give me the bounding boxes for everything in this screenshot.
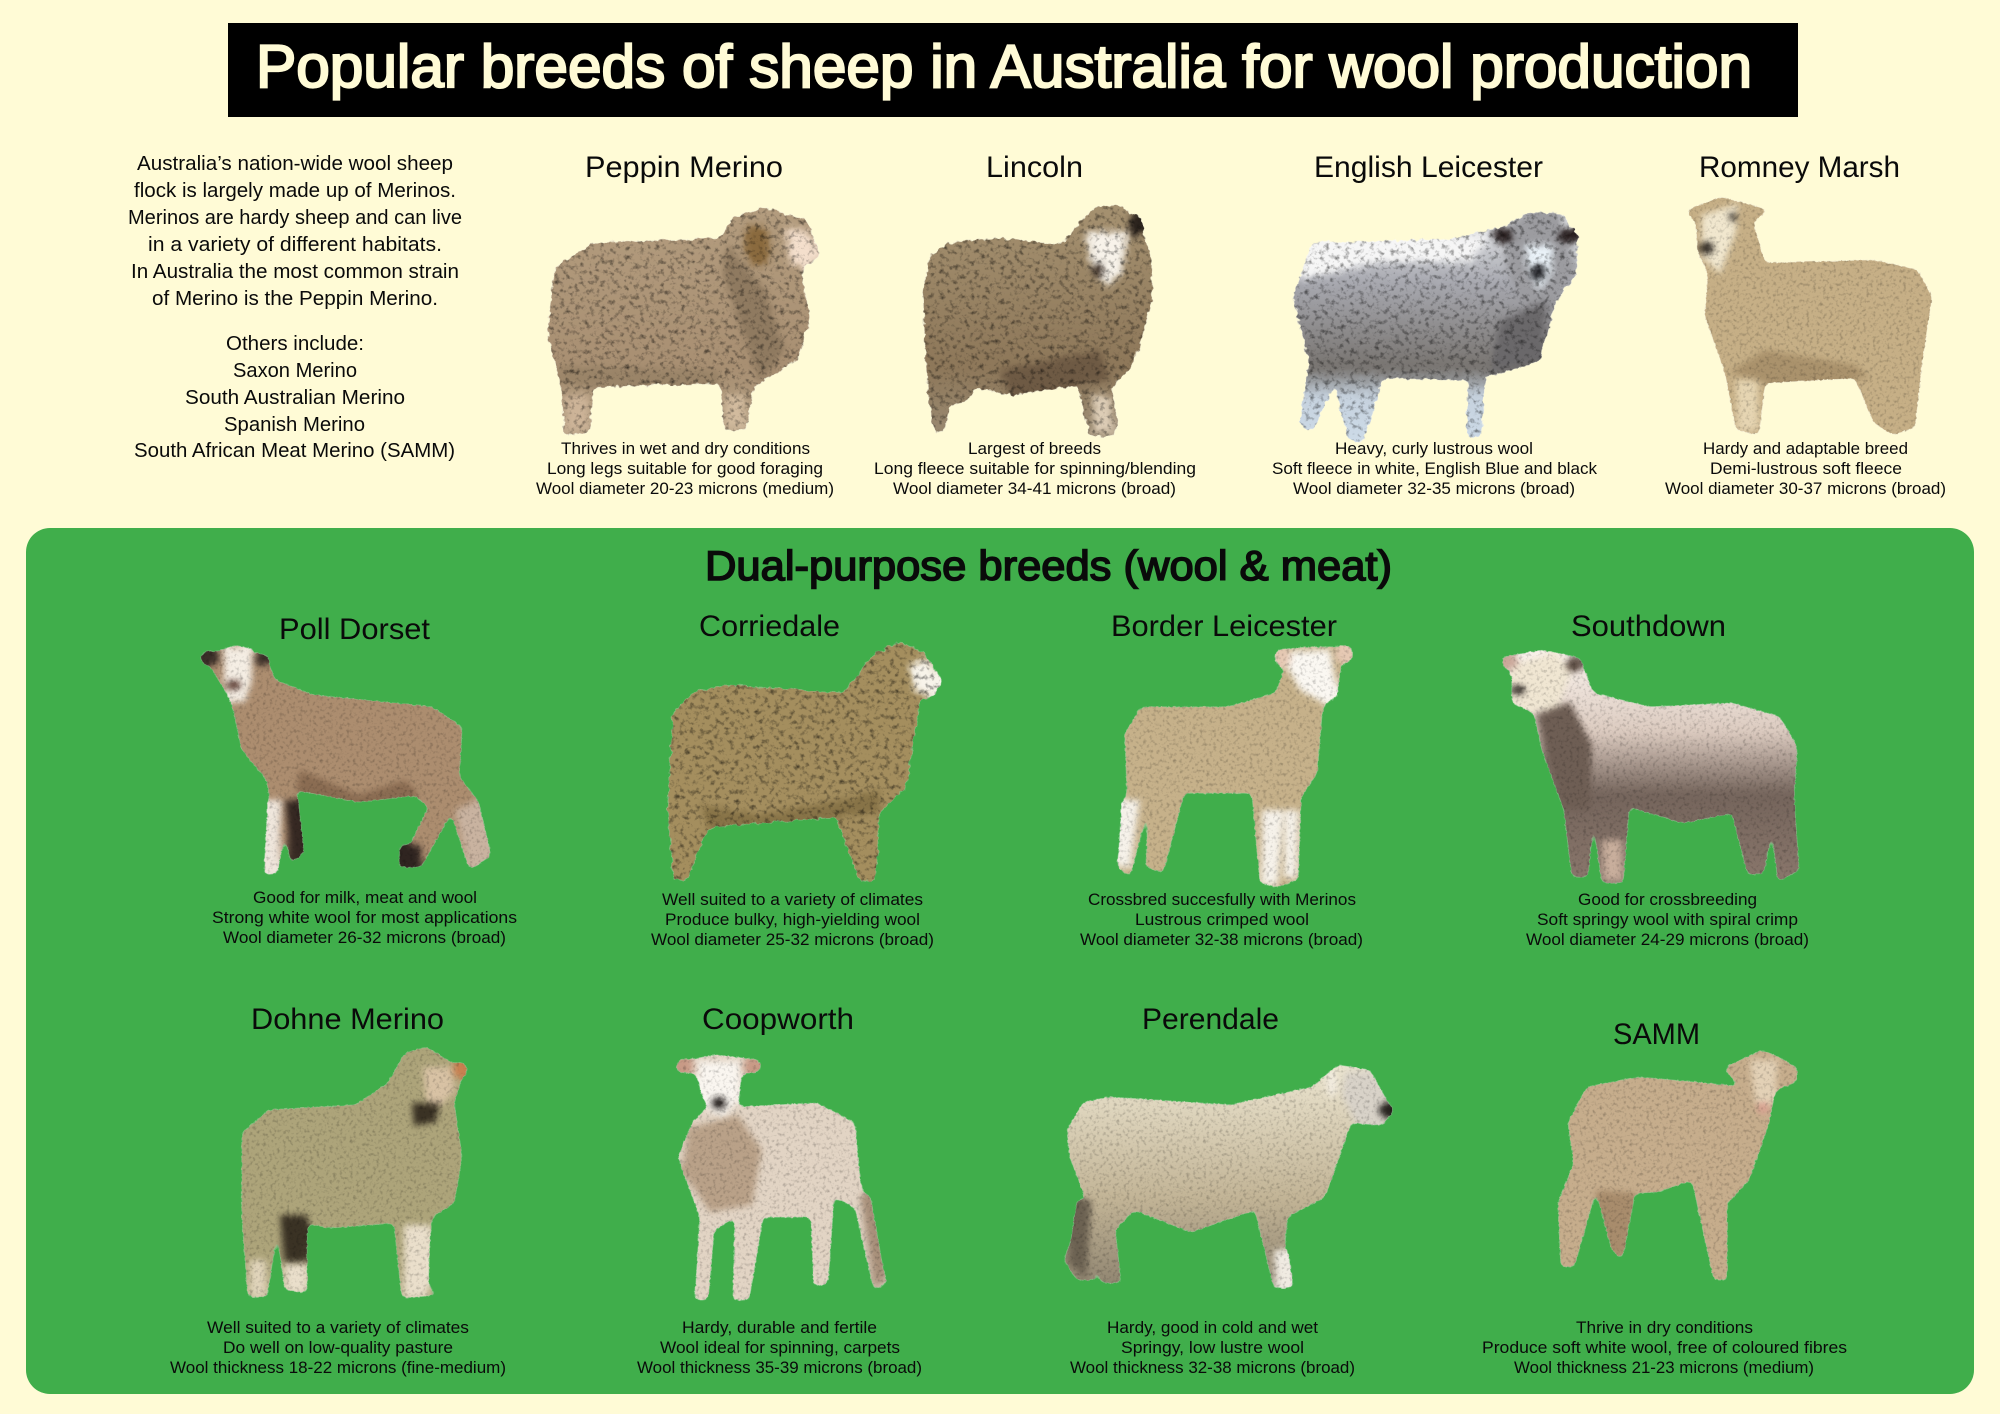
description: Soft fleece in white, English Blue and black <box>1272 460 1598 478</box>
heading: Southdown <box>1571 610 1726 643</box>
intro text block: Australia’s nation-wide wool sheep <box>137 153 453 175</box>
description: Produce bulky, high-yielding wool <box>665 911 920 929</box>
intro text block: Merinos are hardy sheep and can live <box>128 207 462 229</box>
icon: Corriedale sheep <box>668 642 942 882</box>
description <box>1272 440 1598 498</box>
intro text block: Saxon Merino <box>233 360 357 382</box>
description <box>651 891 934 949</box>
title banner: Popular breeds of sheep in Australia for wool production <box>256 33 1752 100</box>
intro text block <box>128 153 462 462</box>
description: Wool diameter 25-32 microns (broad) <box>651 931 934 949</box>
heading: Coopworth <box>702 1003 854 1036</box>
description: Wool diameter 24-29 microns (broad) <box>1526 931 1809 949</box>
heading: SAMM <box>1613 1018 1700 1051</box>
icon: Romney Marsh sheep <box>1686 197 1932 435</box>
breed: Romney Marsh <box>1665 151 1946 498</box>
description: Crossbred succesfully with Merinos <box>1088 891 1356 909</box>
description: Wool thickness 21-23 microns (medium) <box>1514 1359 1814 1377</box>
icon: Southdown sheep <box>1502 650 1799 883</box>
heading: Perendale <box>1142 1003 1279 1036</box>
breed: Coopworth <box>637 1003 922 1377</box>
description: Good for crossbreeding <box>1578 891 1757 909</box>
description: Produce soft white wool, free of coloured fibres <box>1482 1339 1847 1357</box>
breed: Border Leicester <box>1080 610 1363 949</box>
breed: Southdown <box>1502 610 1809 949</box>
heading: Peppin Merino <box>585 151 783 184</box>
description <box>637 1319 922 1377</box>
description: Do well on low-quality pasture <box>223 1339 453 1357</box>
description <box>1665 440 1946 498</box>
description: Thrive in dry conditions <box>1576 1319 1753 1337</box>
description: Wool ideal for spinning, carpets <box>660 1339 900 1357</box>
description: Heavy, curly lustrous wool <box>1335 440 1533 458</box>
description: Strong white wool for most applications <box>212 909 517 927</box>
intro text block: Spanish Merino <box>224 414 365 436</box>
description: Hardy and adaptable breed <box>1703 440 1908 458</box>
breed: SAMM <box>1482 1018 1847 1377</box>
description: Wool diameter 32-35 microns (broad) <box>1293 480 1575 498</box>
icon: Border Leicester sheep <box>1117 645 1353 887</box>
description: Wool thickness 35-39 microns (broad) <box>637 1359 922 1377</box>
description <box>874 440 1196 498</box>
description: Largest of breeds <box>968 440 1101 458</box>
intro text block: in a variety of different habitats. <box>148 234 442 256</box>
heading: Dohne Merino <box>251 1003 444 1036</box>
icon: Perendale sheep <box>1064 1065 1393 1288</box>
description: Wool diameter 20-23 microns (medium) <box>536 480 834 498</box>
description: Well suited to a variety of climates <box>662 891 923 909</box>
breed: Peppin Merino <box>536 151 834 498</box>
breed: English Leicester <box>1272 151 1598 498</box>
icon: Peppin Merino sheep <box>548 208 820 435</box>
panel heading: Dual-purpose breeds (wool & meat) <box>705 542 1392 589</box>
icon: Lincoln sheep <box>923 205 1152 436</box>
heading: Romney Marsh <box>1699 151 1900 184</box>
heading: English Leicester <box>1314 151 1543 184</box>
icon: Dohne Merino sheep <box>242 1047 467 1298</box>
description <box>536 440 834 498</box>
intro text block: of Merino is the Peppin Merino. <box>152 288 438 310</box>
description: Demi-lustrous soft fleece <box>1710 460 1902 478</box>
description: Wool diameter 26-32 microns (broad) <box>223 929 506 947</box>
breed: Dohne Merino <box>170 1003 506 1377</box>
description: Wool thickness 32-38 microns (broad) <box>1070 1359 1355 1377</box>
icon: Poll Dorset sheep <box>200 645 491 875</box>
intro text block: South Australian Merino <box>185 387 405 409</box>
description: Long legs suitable for good foraging <box>547 460 823 478</box>
title banner <box>228 23 1798 117</box>
description: Wool thickness 18-22 microns (fine-medium) <box>170 1359 506 1377</box>
description <box>1526 891 1809 949</box>
description <box>170 1319 506 1377</box>
breed: Lincoln <box>874 151 1196 498</box>
description: Long fleece suitable for spinning/blending <box>874 460 1196 478</box>
breed: Corriedale <box>651 610 942 949</box>
intro text block: flock is largely made up of Merinos. <box>134 180 456 202</box>
heading: Lincoln <box>986 151 1083 184</box>
description: Springy, low lustre wool <box>1121 1339 1304 1357</box>
description: Lustrous crimped wool <box>1135 911 1309 929</box>
description: Hardy, durable and fertile <box>682 1319 877 1337</box>
description <box>1070 1319 1355 1377</box>
heading: Border Leicester <box>1111 610 1337 643</box>
icon: SAMM sheep <box>1558 1050 1797 1280</box>
description: Well suited to a variety of climates <box>207 1319 469 1337</box>
description <box>212 889 517 947</box>
heading: Poll Dorset <box>279 613 431 646</box>
description: Soft springy wool with spiral crimp <box>1537 911 1798 929</box>
description: Wool diameter 30-37 microns (broad) <box>1665 480 1946 498</box>
intro text block: South African Meat Merino (SAMM) <box>134 440 455 462</box>
description: Good for milk, meat and wool <box>253 889 477 907</box>
description: Hardy, good in cold and wet <box>1107 1319 1318 1337</box>
description <box>1482 1319 1847 1377</box>
description <box>1080 891 1363 949</box>
icon: Coopworth sheep <box>676 1055 887 1300</box>
icon: English Leicester sheep <box>1293 213 1578 442</box>
breed: Perendale <box>1064 1003 1393 1377</box>
intro text block: Others include: <box>226 333 364 355</box>
description: Thrives in wet and dry conditions <box>561 440 810 458</box>
heading: Corriedale <box>699 610 840 643</box>
description: Wool diameter 34-41 microns (broad) <box>893 480 1176 498</box>
panel: dual-purpose breeds <box>26 528 1974 1394</box>
breed: Poll Dorset <box>200 613 517 947</box>
intro text block: In Australia the most common strain <box>131 261 459 283</box>
description: Wool diameter 32-38 microns (broad) <box>1080 931 1363 949</box>
